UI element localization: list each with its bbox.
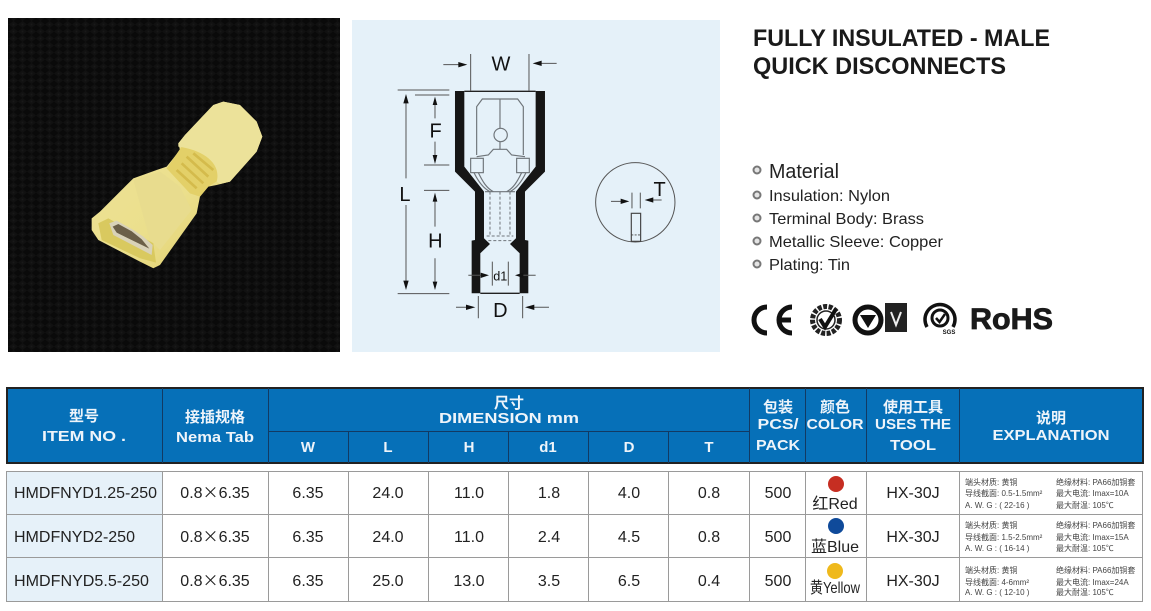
RoHS mark: RoHS — [970, 303, 1053, 336]
row: HMDFNYD1.25-250: 最大耐温: 105℃ — [1056, 500, 1114, 510]
material list: Insulation: Nylon — [769, 188, 890, 205]
row: HMDFNYD2-250: 蓝Blue — [811, 538, 859, 556]
table header: W — [301, 439, 316, 456]
row: HMDFNYD5.5-250: 端头材质: 黄铜 — [965, 565, 1017, 575]
row: HMDFNYD2-250: 500 — [765, 529, 791, 546]
row: HMDFNYD5.5-250: 13.0 — [453, 573, 485, 590]
row: HMDFNYD2-250: 0.8 — [698, 529, 720, 546]
row: HMDFNYD2-250: 24.0 — [372, 529, 404, 546]
row: HMDFNYD1.25-250: HMDFNYD1.25-250 — [14, 485, 157, 502]
row: HMDFNYD1.25-250: 导线截面: 0.5-1.5mm² — [965, 488, 1043, 498]
table header: PACK — [756, 437, 800, 454]
row: HMDFNYD2-250: 0.8×6.35 — [180, 523, 250, 547]
row: HMDFNYD1.25-250: 红Red — [812, 495, 858, 513]
row: HMDFNYD2-250: HX-30J — [886, 529, 940, 546]
material list: Material — [769, 161, 839, 183]
row: HMDFNYD5.5-250: 0.8×6.35 — [180, 567, 250, 591]
row: HMDFNYD5.5-250: HMDFNYD5.5-250 — [14, 573, 149, 590]
table header: 尺寸 — [494, 395, 524, 412]
row: HMDFNYD5.5-250: 导线截面: 4-6mm² — [965, 577, 1029, 587]
row: HMDFNYD2-250: 11.0 — [454, 529, 484, 546]
table header: TOOL — [890, 437, 936, 454]
row: HMDFNYD1.25-250: 最大电流: Imax=10A — [1056, 488, 1129, 498]
row: HMDFNYD1.25-250: 11.0 — [454, 485, 484, 502]
table header: 接插规格 — [185, 408, 245, 426]
row: HMDFNYD1.25-250: 1.8 — [538, 485, 560, 502]
row: HMDFNYD5.5-250: 500 — [765, 573, 791, 590]
row: HMDFNYD1.25-250 — [14, 476, 1135, 513]
table header: 使用工具 — [883, 398, 943, 416]
row: HMDFNYD2-250 — [14, 518, 1135, 556]
row: HMDFNYD5.5-250: 黄Yellow — [810, 579, 860, 597]
icon: SGS check mark: SGS — [943, 330, 955, 336]
icon: BSI and UKAS marks — [855, 303, 907, 333]
panel: dimension drawing — [352, 20, 720, 352]
table header: DIMENSION mm — [439, 410, 579, 427]
table header: 型号 — [69, 408, 99, 425]
row: HMDFNYD1.25-250: 24.0 — [372, 485, 404, 502]
row: HMDFNYD2-250: 2.4 — [538, 529, 560, 546]
row: HMDFNYD2-250: 4.5 — [618, 529, 640, 546]
material list: Metallic Sleeve: Copper — [769, 234, 944, 251]
title: QUICK DISCONNECTS — [753, 53, 1006, 80]
row: HMDFNYD5.5-250: HX-30J — [886, 573, 940, 590]
title: FULLY INSULATED - MALE — [753, 25, 1050, 52]
table header: EXPLANATION — [992, 427, 1110, 444]
dimension lines — [398, 54, 557, 318]
dimension letters: F — [430, 121, 442, 143]
row: HMDFNYD5.5-250: 最大耐温: 105℃ — [1056, 587, 1114, 597]
row: HMDFNYD5.5-250 — [14, 563, 1135, 597]
dimension letters: H — [428, 231, 443, 253]
table header: USES THE — [875, 416, 951, 433]
row: HMDFNYD5.5-250: 绝缘材料: PA66加铜套 — [1056, 565, 1135, 575]
detail circle: thickness T: T — [654, 179, 666, 201]
detail circle: thickness T — [596, 163, 675, 242]
row: HMDFNYD2-250: A. W. G : ( 16-14 ) — [965, 544, 1030, 553]
row: HMDFNYD5.5-250: 最大电流: Imax=24A — [1056, 577, 1129, 587]
table header: d1 — [539, 439, 557, 456]
dimension letters: W — [492, 54, 511, 76]
material list: Plating: Tin — [769, 257, 850, 274]
row: HMDFNYD1.25-250: HX-30J — [886, 485, 940, 502]
row: HMDFNYD2-250: 导线截面: 1.5-2.5mm² — [965, 532, 1043, 542]
dimension letters: L — [399, 184, 411, 206]
table header: ITEM NO . — [42, 428, 126, 445]
icon: SGS check mark — [925, 305, 955, 336]
table header: COLOR — [806, 416, 864, 433]
row: HMDFNYD2-250: 最大电流: Imax=15A — [1056, 532, 1129, 542]
material list: Terminal Body: Brass — [769, 211, 924, 228]
row: HMDFNYD2-250: HMDFNYD2-250 — [14, 529, 135, 546]
dimension letters: d1 — [493, 269, 507, 283]
row: HMDFNYD2-250: 最大耐温: 105℃ — [1056, 543, 1114, 553]
photo: yellow insulated connector on black mat — [8, 18, 340, 352]
material list — [754, 161, 944, 274]
table header: L — [383, 439, 393, 456]
icon: CE mark — [754, 307, 792, 333]
table header: 颜色 — [820, 398, 850, 416]
row: HMDFNYD1.25-250: 6.35 — [292, 485, 324, 502]
row: HMDFNYD1.25-250: 500 — [765, 485, 791, 502]
row: HMDFNYD5.5-250: 6.5 — [618, 573, 640, 590]
certification icons — [754, 303, 1053, 336]
row: HMDFNYD2-250: 端头材质: 黄铜 — [965, 520, 1017, 530]
connector body walls — [455, 91, 545, 293]
row: HMDFNYD5.5-250: 25.0 — [372, 573, 404, 590]
row: HMDFNYD1.25-250: 端头材质: 黄铜 — [965, 477, 1017, 487]
dimension letters: D — [493, 300, 508, 322]
table header: T — [704, 439, 714, 456]
row: HMDFNYD1.25-250: 4.0 — [618, 485, 640, 502]
row: HMDFNYD5.5-250: 0.4 — [698, 573, 720, 590]
terminal inner outline — [471, 99, 529, 241]
table header: PCS/ — [758, 416, 799, 433]
row: HMDFNYD1.25-250: 绝缘材料: PA66加铜套 — [1056, 477, 1135, 487]
table header: 说明 — [1036, 410, 1066, 427]
table header: D — [624, 439, 635, 456]
table header: Nema Tab — [176, 429, 254, 446]
table body — [6, 471, 1143, 602]
table header: 包装 — [763, 398, 793, 416]
row: HMDFNYD5.5-250: 6.35 — [292, 573, 324, 590]
table header — [7, 388, 1143, 463]
title — [753, 25, 1050, 80]
row: HMDFNYD2-250: 绝缘材料: PA66加铜套 — [1056, 520, 1135, 530]
dimension letters — [399, 54, 511, 322]
icon: quality check seal — [812, 306, 840, 334]
table header: H — [464, 439, 474, 456]
row: HMDFNYD1.25-250: A. W. G : ( 22-16 ) — [965, 501, 1030, 510]
row: HMDFNYD2-250: 6.35 — [292, 529, 324, 546]
row: HMDFNYD1.25-250: 0.8×6.35 — [180, 479, 250, 503]
row: HMDFNYD5.5-250: 3.5 — [538, 573, 560, 590]
row: HMDFNYD5.5-250: A. W. G : ( 12-10 ) — [965, 588, 1030, 597]
row: HMDFNYD1.25-250: 0.8 — [698, 485, 720, 502]
